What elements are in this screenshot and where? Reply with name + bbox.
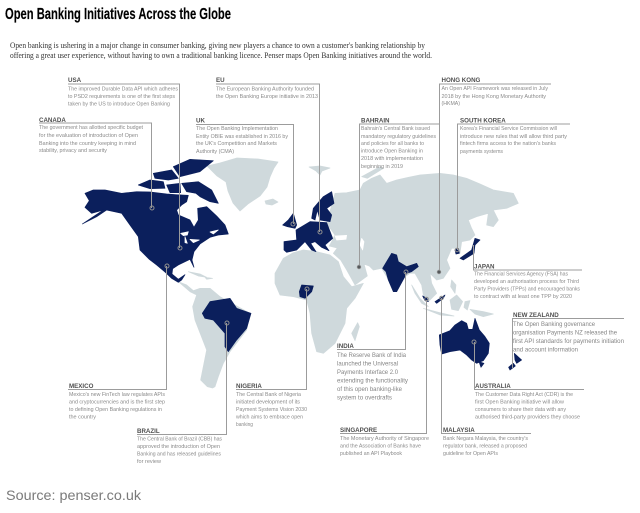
callout: Bahrain: Bahrain's Central Bank issued bbox=[361, 126, 430, 132]
callout: EU bbox=[216, 77, 322, 234]
world map bbox=[82, 158, 522, 388]
source line: Source: penser.co.uk bbox=[6, 488, 141, 503]
callout: Bahrain bbox=[357, 118, 439, 269]
callout: New Zealand: NEW ZEALAND bbox=[513, 312, 559, 319]
callout: UK: The Open Banking Implementation bbox=[196, 126, 278, 132]
callout: Canada: CANADA bbox=[39, 117, 66, 124]
callout: Canada: The government has allotted specific budget bbox=[39, 125, 143, 131]
callout: Nigeria: The Central Bank of Nigeria bbox=[236, 392, 301, 398]
callout: Australia: The Customer Data Right Act (CDR) is the bbox=[475, 392, 573, 398]
callout: UK: Authority (CMA) bbox=[196, 149, 234, 155]
callout: Singapore: The Monetary Authority of Singapore bbox=[340, 436, 429, 442]
callout: USA bbox=[68, 77, 182, 250]
callout: Nigeria: banking bbox=[236, 422, 253, 428]
callout: Australia: first Open Banking initiative will allow bbox=[475, 400, 564, 406]
callout: Nigeria: Payment Systems Vision 2030 bbox=[236, 407, 307, 413]
callout: Canada: Banking into the country keeping in mind bbox=[39, 141, 136, 147]
callout: EU: EU bbox=[216, 77, 225, 84]
land: grey continents bbox=[178, 158, 518, 388]
callout: Hong Kong: An Open API Framework was released in July bbox=[442, 86, 548, 92]
callout: Malaysia bbox=[440, 296, 531, 457]
callout: Canada: for the evaluation of introduction of Open bbox=[39, 133, 138, 139]
callout: Nigeria: initiated development of its bbox=[236, 400, 300, 406]
callout: Japan: to contract with at least one TPP by 2020 bbox=[474, 294, 572, 300]
callout: Brazil: The Central Bank of Brazil (CBB) has bbox=[137, 436, 222, 442]
callout: New Zealand: organisation Payments NZ released the bbox=[513, 330, 617, 336]
callout: South Korea: fintech firms access to the nation's banks bbox=[460, 141, 556, 147]
callout: New Zealand: The Open Banking governance bbox=[513, 321, 595, 328]
callout: Australia: authorised third-party providers they choose bbox=[475, 414, 580, 420]
callout: UK bbox=[196, 118, 295, 226]
land: New Zealand bbox=[509, 353, 522, 370]
callout: EU: The European Banking Authority founded bbox=[216, 86, 314, 92]
callout: USA: to PSD2 requirements is one of the first steps bbox=[68, 94, 175, 100]
callout: Hong Kong bbox=[437, 77, 551, 274]
callout: Nigeria: NIGERIA bbox=[236, 383, 262, 390]
callout: Canada: stability, privacy and security bbox=[39, 148, 107, 154]
callout: India: system to overdrafts bbox=[337, 394, 392, 402]
callout: Mexico: the country bbox=[69, 414, 96, 420]
callout: Japan: developed an authorisation process for Third bbox=[474, 279, 579, 285]
callout: Singapore: SINGAPORE bbox=[340, 427, 377, 434]
callout: EU: the Open Banking Europe initiative in 2013 bbox=[216, 94, 318, 100]
callout: Hong Kong: 2018 by the Hong Kong Monetary Authority bbox=[442, 94, 546, 100]
callout: India: launched the Universal bbox=[337, 360, 398, 368]
callout: Brazil: Banking and has released guidelines bbox=[137, 452, 221, 458]
callout: South Korea bbox=[455, 118, 570, 252]
callout: Japan bbox=[474, 245, 582, 300]
callout: Mexico: to defining Open Banking regulations in bbox=[69, 407, 162, 413]
callout: UK: UK bbox=[196, 118, 205, 124]
callout: India: The Reserve Bank of India bbox=[337, 352, 406, 359]
land: North America bbox=[82, 159, 228, 282]
callout: Brazil: for review bbox=[137, 459, 161, 465]
callout: Bahrain: introduce Open Banking in bbox=[361, 148, 423, 154]
callout: Malaysia: Bank Negara Malaysia, the country's bbox=[443, 436, 528, 442]
callout: UK: the UK's Competition and Markets bbox=[196, 141, 277, 147]
callout: Canada bbox=[39, 117, 154, 210]
callout: India: INDIA bbox=[337, 343, 354, 350]
callout: Hong Kong: HONG KONG bbox=[442, 77, 481, 84]
intro text bbox=[10, 40, 432, 60]
callout: Singapore bbox=[340, 297, 429, 457]
callout: New Zealand: first API standards for payments initiation bbox=[513, 338, 624, 345]
callout: Brazil: approved the introduction of Open bbox=[137, 444, 220, 450]
callout: Bahrain: BAHRAIN bbox=[361, 118, 390, 124]
callout: Mexico: MEXICO bbox=[69, 383, 94, 390]
callout: USA: The improved Durable Data API which adheres bbox=[68, 86, 178, 92]
intro text: Open banking is ushering in a major change in consumer banking, giving new players a chance to own a customer's banking relationship by bbox=[10, 40, 426, 50]
callout: Nigeria bbox=[235, 287, 309, 428]
callout: UK: Entity OBIE was established in 2016 by bbox=[196, 134, 288, 140]
callout: Bahrain: beginning in 2019 bbox=[361, 164, 403, 170]
callout: India bbox=[337, 270, 409, 402]
intro text: offering a great user experience, without having to own a traditional banking licence. Penser maps Open Banking initiatives around the world. bbox=[10, 50, 432, 60]
callout: Australia: consumers to share their data with any bbox=[475, 407, 566, 413]
land: India, Malaysia, Japan, Korea, Australia bbox=[383, 238, 489, 367]
callout: India: of this open banking-like bbox=[337, 386, 402, 393]
callout: Australia: AUSTRALIA bbox=[475, 383, 511, 390]
callout: Mexico bbox=[68, 264, 169, 420]
callout: New Zealand bbox=[512, 312, 624, 368]
Great Lakes bbox=[181, 230, 218, 243]
callout: Japan: Party Providers (TPPs) and encouraged banks bbox=[474, 286, 580, 292]
callout: Nigeria: which aims to embrace open bbox=[235, 414, 303, 420]
callout: Singapore: published an API Playbook bbox=[340, 451, 402, 457]
callout: India: Payments Interface 2.0 bbox=[337, 369, 398, 376]
callout: Japan: The Financial Services Agency (FSA) has bbox=[474, 272, 568, 278]
callout: India: extending the functionality bbox=[337, 378, 409, 384]
callout: Malaysia: MALAYSIA bbox=[443, 427, 475, 434]
callout: Singapore: and the Association of Banks have bbox=[340, 444, 421, 450]
callout: South Korea: introduce new rules that will allow third party bbox=[460, 134, 567, 140]
land: Brazil bbox=[202, 298, 251, 352]
callout: Hong Kong: (HKMA) bbox=[442, 101, 460, 107]
callout: USA: USA bbox=[68, 77, 82, 84]
callout: Bahrain: and policies for all banks to bbox=[361, 141, 424, 147]
callout: Australia bbox=[472, 340, 584, 420]
callout: South Korea: payments systems bbox=[460, 149, 503, 155]
callout: New Zealand: and account information bbox=[513, 346, 578, 354]
callout: Mexico: and cryptocurrencies and is the first step bbox=[69, 400, 165, 406]
callout: South Korea: SOUTH KOREA bbox=[460, 118, 506, 124]
callout: Malaysia: guideline for Open APIs bbox=[443, 451, 498, 457]
callout: Bahrain: 2018 with implementation bbox=[361, 156, 423, 162]
callout: Japan: JAPAN bbox=[474, 264, 495, 270]
sea cut-outs bbox=[335, 235, 364, 250]
title: Open Banking Initiatives Across the Globe bbox=[5, 6, 231, 23]
callout: Brazil bbox=[137, 321, 229, 465]
callout: Malaysia: regulator bank, released a proposed bbox=[443, 444, 527, 450]
callout: Brazil: BRAZIL bbox=[137, 428, 160, 435]
callout: South Korea: Korea's Financial Service Commission will bbox=[460, 126, 557, 132]
callout: Mexico: Mexico's new FinTech law regulates APIs bbox=[69, 392, 165, 398]
land: Europe and Nigeria bbox=[283, 192, 334, 298]
callout: Bahrain: mandatory regulatory guidelines bbox=[361, 134, 436, 140]
callout: USA: taken by the US to introduce Open Banking bbox=[68, 102, 170, 108]
